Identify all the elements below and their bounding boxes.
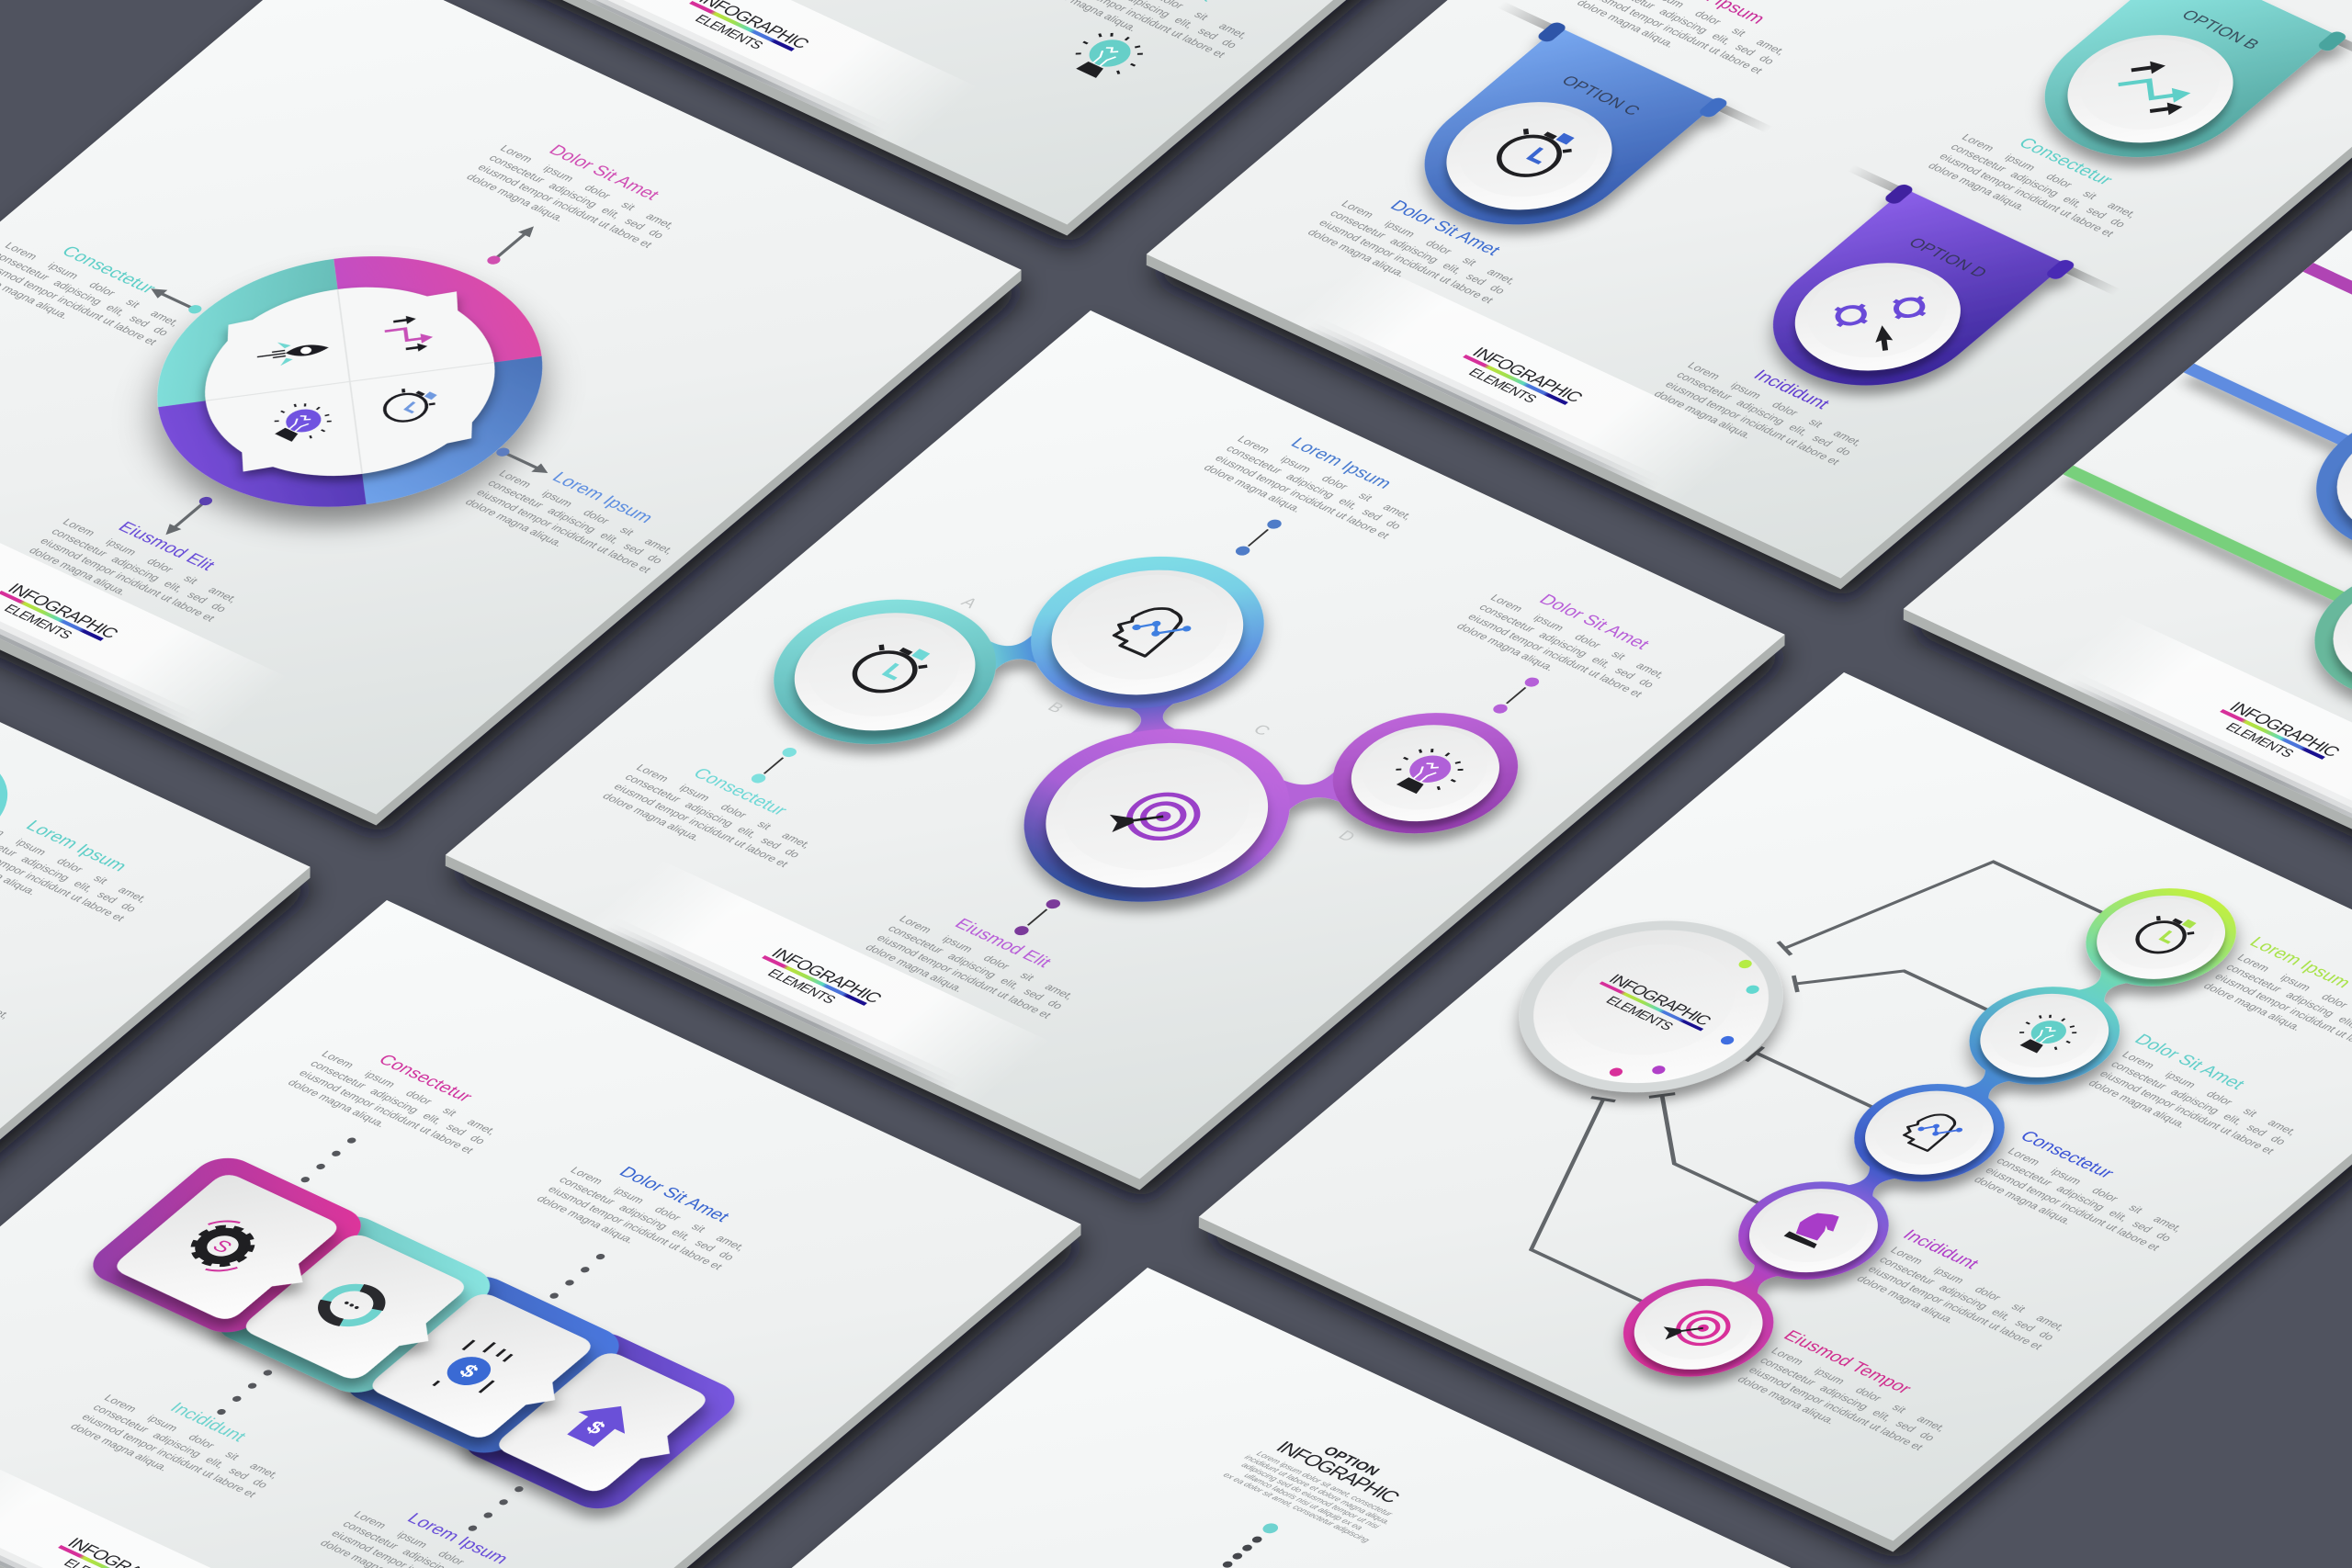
chain diagram bbox=[702, 465, 1579, 987]
hub logo bbox=[1585, 970, 1717, 1043]
text block: dolor sit amet bbox=[464, 127, 698, 260]
text block: eiusmod tempor: eiusmod tempor incididunt ut labore et bbox=[1746, 1364, 1927, 1452]
text block: lorem ipsum bbox=[1201, 417, 1435, 550]
description: Lorem ipsum dolor sit amet, consectetur bbox=[1255, 1450, 1396, 1518]
ring C bbox=[969, 695, 1344, 935]
icon: target bbox=[1097, 782, 1211, 854]
text block: dolor sit amet: dolore magna aliqua. bbox=[534, 1193, 638, 1246]
text block: consectetur: consectetur adipiscing elit, sed do bbox=[308, 1058, 489, 1146]
text block: eiusmod elit: consectetur adipiscing elit, sed do bbox=[885, 923, 1066, 1011]
text block: dolor sit amet: Dolor Sit Amet bbox=[615, 1164, 734, 1225]
text block: incididunt: dolore magna aliqua. bbox=[1854, 1273, 1958, 1325]
plate D bbox=[1316, 706, 1534, 846]
text block: lorem ipsum: Lorem Ipsum bbox=[21, 818, 131, 874]
text block: eiusmod elit bbox=[863, 897, 1097, 1030]
segment: purple bbox=[122, 333, 454, 535]
panel: right sheet bbox=[1895, 64, 2352, 944]
plate A bbox=[752, 591, 1018, 761]
text block: consectetur: eiusmod tempor incididunt ut labore et bbox=[611, 782, 792, 869]
text block: dolor sit amet: eiusmod tempor incididunt ut labore et bbox=[1316, 218, 1497, 306]
hub bbox=[1465, 888, 1837, 1125]
text block: dolor sit amet: dolore magna aliqua. bbox=[2086, 1077, 2189, 1130]
connector: B to C bbox=[1121, 699, 1183, 739]
ribbon: option B: OPTION B bbox=[2177, 7, 2264, 52]
text block: dolor sit amet: consectetur adipiscing elit, sed do bbox=[2108, 1059, 2289, 1147]
label A: A bbox=[957, 594, 981, 611]
icon: dollar arrow bbox=[557, 1395, 644, 1451]
text block: lorem ipsum: dolore magna aliqua. bbox=[2200, 981, 2304, 1032]
text block: incididunt: eiusmod tempor incididunt ut labore et bbox=[1662, 379, 1843, 468]
text block: incididunt bbox=[1850, 1226, 2088, 1361]
text block: consectetur: consectetur adipiscing elit, sed do bbox=[1994, 1156, 2175, 1244]
arrow: right bbox=[493, 446, 553, 478]
icon: rocket bbox=[239, 318, 347, 387]
pin: eiusmod elit bbox=[1012, 897, 1063, 937]
text block: lorem ipsum bbox=[1574, 0, 1808, 85]
logo: INFOGRAPHIC bbox=[1468, 344, 1587, 406]
text block: eiusmod elit: Eiusmod Elit bbox=[114, 519, 220, 574]
dotted leader: incididunt bbox=[215, 1369, 274, 1416]
description: ullamco laboris nisi ut aliquip ex ea bbox=[1242, 1472, 1365, 1531]
arrow: left bbox=[146, 285, 205, 316]
text block: dolor sit amet: consectetur adipiscing elit, sed do bbox=[556, 1174, 737, 1262]
band 2 bbox=[205, 1208, 503, 1401]
icon: head bbox=[1103, 600, 1199, 661]
text block: incididunt: dolore magna aliqua. bbox=[68, 1421, 171, 1473]
plate 3 bbox=[366, 1290, 612, 1449]
logo bbox=[748, 944, 886, 1020]
text block: consectetur: Lorem ipsum dolor sit amet, bbox=[2, 241, 183, 328]
leader lines bbox=[1453, 825, 2111, 1305]
panel: process hub sheet bbox=[1191, 672, 2352, 1552]
text block: dolor sit amet: eiusmod tempor incididunt ut labore et bbox=[475, 162, 656, 250]
arrow: bottom bbox=[160, 495, 216, 537]
ribbon: option D: OPTION D bbox=[1905, 235, 1991, 280]
text block: consectetur: eiusmod tempor incididunt ut labore et bbox=[1937, 151, 2118, 239]
text block: consectetur bbox=[1968, 1128, 2205, 1262]
dotted leader bbox=[1218, 1521, 1281, 1568]
ribbon: option B bbox=[1951, 0, 2352, 209]
text block: consectetur: eiusmod tempor incididunt ut labore et bbox=[1983, 1165, 2163, 1253]
text block: lorem ipsum: Lorem Ipsum bbox=[2245, 934, 2352, 991]
text block: lorem ipsum: Lorem ipsum dolor sit amet, bbox=[1235, 434, 1415, 522]
text block: incididunt: eiusmod tempor incididunt ut labore et bbox=[1865, 1264, 2046, 1352]
text block: consectetur: dolore magna aliqua. bbox=[600, 791, 704, 843]
dotted leader: lorem ipsum bbox=[467, 1485, 526, 1532]
text block: dolor sit amet: Dolor Sit Amet bbox=[1534, 592, 1654, 653]
text block: dolor sit amet: Lorem ipsum dolor sit amet, bbox=[497, 143, 678, 231]
logo: INFOGRAPHIC bbox=[4, 581, 122, 642]
text block: dolor sit amet: eiusmod tempor incididunt ut labore et bbox=[1465, 612, 1645, 699]
text block: eiusmod elit: consectetur adipiscing elit, sed do bbox=[49, 526, 230, 615]
ring: green bbox=[2002, 413, 2352, 726]
segment: magenta bbox=[246, 229, 578, 430]
connector: C to D bbox=[1276, 767, 1347, 816]
text block: consectetur: dolore magna aliqua. bbox=[1925, 161, 2029, 212]
text block: lorem ipsum: dolore magna aliqua. bbox=[462, 497, 566, 548]
text block: dolor sit amet: Dolor Sit Amet bbox=[545, 141, 664, 204]
segment: blue bbox=[262, 308, 584, 525]
text block: eiusmod elit: Eiusmod Elit bbox=[950, 916, 1057, 971]
text block: lorem ipsum bbox=[2198, 934, 2352, 1069]
text block: lorem ipsum: Lorem Ipsum bbox=[548, 469, 658, 526]
text block: incididunt: consectetur adipiscing elit, sed do bbox=[1674, 369, 1854, 457]
text block: eiusmod elit: Lorem ipsum dolor sit amet, bbox=[897, 914, 1077, 1001]
ring: teal bbox=[0, 732, 39, 869]
logo: ELEMENTS bbox=[763, 967, 839, 1007]
text block: lorem ipsum bbox=[462, 452, 696, 585]
square chain bbox=[78, 1150, 748, 1517]
icon: head bbox=[1896, 1108, 1968, 1155]
text block: incididunt: Lorem ipsum dolor sit amet, bbox=[1685, 360, 1865, 448]
text block: consectetur: dolore magna aliqua. bbox=[1971, 1174, 2075, 1226]
text block: second bbox=[0, 916, 33, 1049]
ribbon: option D bbox=[1679, 162, 2124, 437]
text block: eiusmod elit: Lorem ipsum dolor sit amet, bbox=[60, 516, 241, 604]
plate B bbox=[1006, 546, 1288, 728]
ribbon: option C bbox=[1328, 0, 1776, 276]
text block: eiusmod tempor bbox=[1731, 1327, 1969, 1462]
text block: incididunt: Incididunt bbox=[165, 1399, 251, 1445]
text block: consectetur: Consectetur bbox=[2014, 135, 2118, 188]
text block: dolor sit amet bbox=[534, 1148, 768, 1281]
inner plate bbox=[121, 235, 578, 528]
logo: ELEMENTS bbox=[2222, 721, 2297, 761]
text block: dolor sit amet: consectetur adipiscing elit, sed do bbox=[486, 152, 667, 241]
text block: eiusmod tempor: consectetur adipiscing elit, sed do bbox=[1757, 1355, 1938, 1443]
panel: option ribbons sheet bbox=[1138, 0, 2352, 590]
icon: stopwatch bbox=[376, 383, 443, 426]
band 4 bbox=[452, 1325, 748, 1517]
icon: coin bbox=[425, 1336, 523, 1402]
logo: INFOGRAPHIC bbox=[767, 945, 886, 1007]
hub logo: ELEMENTS bbox=[1602, 994, 1677, 1033]
text block: dolor sit amet bbox=[1453, 576, 1688, 709]
panel: left sheet bbox=[0, 543, 319, 1423]
text block: consectetur: Lorem ipsum dolor sit amet, bbox=[2005, 1145, 2186, 1234]
connector: magenta bbox=[2303, 263, 2352, 389]
text block: dolor sit amet: Lorem ipsum dolor sit amet, bbox=[1487, 592, 1668, 681]
text block: eiusmod tempor: Eiusmod Tempor bbox=[1779, 1327, 1917, 1397]
text block: incididunt: consectetur adipiscing elit, sed do bbox=[90, 1402, 271, 1490]
hub logo: INFOGRAPHIC bbox=[1605, 971, 1715, 1028]
text block: consectetur: Consectetur bbox=[57, 243, 161, 297]
text block: incididunt: Incididunt bbox=[1898, 1226, 1984, 1272]
text block: lorem ipsum: eiusmod tempor incididunt ut labore et bbox=[1212, 453, 1393, 541]
text block: dolor sit amet: eiusmod tempor incididunt ut labore et bbox=[2097, 1068, 2278, 1156]
description: ex ea dolor sit amet, consectetur adipiscing bbox=[1221, 1471, 1372, 1544]
ring A bbox=[729, 571, 1041, 772]
text block: eiusmod elit: eiusmod tempor incididunt ut labore et bbox=[874, 932, 1055, 1021]
text block: consectetur: dolore magna aliqua. bbox=[285, 1077, 389, 1129]
logo: ELEMENTS bbox=[1464, 367, 1540, 406]
icon: bulb bbox=[2007, 1009, 2086, 1059]
icon: knight bbox=[1784, 1207, 1848, 1249]
label D: D bbox=[1335, 828, 1360, 844]
text block: dolor sit amet: consectetur adipiscing elit, sed do bbox=[1328, 208, 1509, 296]
icon: bulb bbox=[1381, 741, 1475, 801]
text block: lorem ipsum: consectetur adipiscing elit, sed do bbox=[485, 478, 666, 566]
icon: stopwatch bbox=[2128, 909, 2202, 958]
text block: incididunt: Lorem ipsum dolor sit amet, bbox=[1888, 1245, 2068, 1333]
ribbon: option C: OPTION C bbox=[1557, 73, 1644, 118]
connector: A to B bbox=[983, 629, 1044, 676]
text block: dolor sit amet: Dolor Sit Amet bbox=[1385, 197, 1505, 259]
description: adipiscing sed do eiusmod tempor ut nisi bbox=[1239, 1461, 1383, 1530]
dotted leader: dolor sit amet bbox=[548, 1253, 606, 1300]
text block: dolor sit amet: consectetur adipiscing elit, sed do bbox=[1476, 602, 1657, 690]
text block: incididunt: dolore magna aliqua. bbox=[1651, 389, 1755, 441]
logo bbox=[44, 1534, 182, 1568]
ring: blue bbox=[2116, 306, 2352, 583]
text block: lorem ipsum bbox=[317, 1493, 551, 1568]
icon: arrows bbox=[356, 301, 461, 367]
text block: consectetur: Consectetur bbox=[2016, 1128, 2119, 1182]
icon: bulb bbox=[1060, 25, 1155, 85]
text block: eiusmod elit bbox=[26, 500, 260, 633]
pin: dolor sit amet bbox=[1490, 676, 1542, 716]
text block: lorem ipsum: eiusmod tempor incididunt ut labore et bbox=[473, 487, 654, 575]
text block: dolor sit amet: Lorem ipsum dolor sit amet, bbox=[568, 1165, 748, 1253]
icon: target bbox=[1655, 1303, 1738, 1356]
text block: lorem ipsum: Lorem Ipsum bbox=[402, 1510, 513, 1567]
text block: incididunt: eiusmod tempor incididunt ut labore et bbox=[79, 1412, 260, 1500]
text block: incididunt bbox=[1651, 344, 1885, 477]
text block: consectetur bbox=[600, 746, 834, 879]
text block: lorem ipsum: consectetur adipiscing elit, sed do bbox=[1223, 444, 1404, 532]
text block: consectetur: consectetur adipiscing elit, sed do bbox=[1948, 141, 2129, 230]
description bbox=[1221, 1448, 1400, 1544]
text block: dolor sit amet: dolore magna aliqua. bbox=[1305, 227, 1408, 279]
text block: incididunt: Incididunt bbox=[1749, 367, 1835, 412]
panel: square chain sheet bbox=[0, 900, 1090, 1568]
pin: consectetur bbox=[749, 746, 799, 784]
text block: consectetur: Lorem ipsum dolor sit amet, bbox=[319, 1049, 499, 1136]
text block: lorem ipsum: Lorem Ipsum bbox=[1286, 434, 1396, 492]
text block: consectetur bbox=[285, 1032, 519, 1166]
description: incididunt ut labore et dolore magna aliqua. bbox=[1242, 1453, 1393, 1526]
plate 1 bbox=[110, 1171, 360, 1331]
label C: C bbox=[1250, 721, 1274, 739]
text block: dolor sit amet bbox=[2082, 1032, 2320, 1166]
text block: consectetur: consectetur adipiscing elit, sed do bbox=[622, 772, 803, 860]
text block: consectetur: Lorem ipsum dolor sit amet, bbox=[633, 762, 814, 851]
heading: OPTION bbox=[1319, 1445, 1383, 1478]
logo: ELEMENTS bbox=[691, 13, 766, 52]
band 3 bbox=[334, 1269, 632, 1461]
ring D bbox=[1295, 690, 1555, 856]
text block: lorem ipsum bbox=[0, 800, 170, 933]
text block: consectetur bbox=[1925, 116, 2159, 249]
text block: incididunt: consectetur adipiscing elit, sed do bbox=[1876, 1255, 2057, 1343]
hub dots bbox=[1607, 958, 1801, 1100]
label B: B bbox=[1044, 699, 1068, 716]
panel: center sheet bbox=[437, 310, 1793, 1190]
logo bbox=[2206, 698, 2344, 773]
arrow: top bbox=[484, 223, 539, 266]
plate 1 bbox=[2066, 879, 2256, 1001]
text block: dolor sit amet: dolore magna aliqua. bbox=[464, 172, 567, 223]
text block: dolor sit amet: Lorem ipsum dolor sit amet, bbox=[1339, 198, 1519, 287]
text block: dolor sit amet: Lorem ipsum dolor sit amet, bbox=[2120, 1049, 2300, 1137]
logo bbox=[675, 0, 813, 65]
plate 2 bbox=[1950, 977, 2139, 1100]
icon: stopwatch bbox=[842, 636, 938, 699]
segment: teal bbox=[115, 239, 437, 456]
plate 4 bbox=[492, 1349, 727, 1502]
text block: eiusmod elit: dolore magna aliqua. bbox=[26, 545, 130, 597]
panel: circular diagram sheet bbox=[0, 0, 1030, 826]
plate C bbox=[992, 716, 1320, 925]
text block: incididunt: Lorem ipsum dolor sit amet, bbox=[101, 1393, 282, 1481]
text block: dolor sit amet: Dolor Sit Amet bbox=[2130, 1032, 2249, 1093]
text block: lorem ipsum: dolore magna aliqua. bbox=[1201, 462, 1305, 514]
text block: dolor sit amet bbox=[1305, 182, 1539, 315]
text block: dolor sit amet: dolore magna aliqua. bbox=[1453, 621, 1557, 673]
dotted leader: consectetur bbox=[300, 1136, 357, 1183]
icon: bulb bbox=[261, 397, 342, 448]
band 1 bbox=[80, 1150, 374, 1340]
text block: incididunt bbox=[68, 1376, 302, 1509]
logo bbox=[1449, 344, 1587, 419]
panel: bottom option sheet bbox=[494, 1268, 1850, 1568]
text block: lorem ipsum: Lorem ipsum dolor sit amet, bbox=[496, 468, 676, 556]
plate 4 bbox=[1718, 1173, 1908, 1294]
icon: gear bbox=[173, 1213, 273, 1278]
logo: INFOGRAPHIC bbox=[2225, 699, 2344, 761]
logo: ELEMENTS bbox=[0, 603, 75, 642]
circular chart bbox=[79, 209, 621, 555]
icon: donut bbox=[313, 1280, 390, 1330]
text block: eiusmod elit: eiusmod tempor incididunt ut labore et bbox=[38, 536, 218, 624]
heading: INFOGRAPHIC bbox=[1272, 1438, 1406, 1506]
text block: consectetur: Consectetur bbox=[688, 765, 792, 819]
ring B bbox=[983, 527, 1312, 738]
plate 5 bbox=[1603, 1269, 1792, 1392]
plate 3 bbox=[1834, 1075, 2024, 1196]
text block: eiusmod tempor: dolore magna aliqua. bbox=[1735, 1374, 1838, 1427]
text block: consectetur: Consectetur bbox=[374, 1052, 477, 1105]
text block: consectetur: eiusmod tempor incididunt ut labore et bbox=[296, 1067, 477, 1156]
text block: dolor sit amet: eiusmod tempor incididunt ut labore et bbox=[545, 1184, 726, 1272]
pin: lorem ipsum bbox=[1233, 518, 1284, 558]
panel: top sheet bbox=[365, 0, 1721, 236]
text block: consectetur bbox=[0, 224, 202, 357]
plate 2 bbox=[239, 1231, 486, 1390]
text block: aliqua bbox=[1036, 0, 1271, 70]
ring chain bbox=[1592, 870, 2267, 1395]
text block: eiusmod elit: dolore magna aliqua. bbox=[863, 942, 967, 994]
text block: eiusmod tempor: Lorem ipsum dolor sit amet, bbox=[1769, 1346, 1949, 1434]
text block: consectetur: Lorem ipsum dolor sit amet, bbox=[1959, 132, 2140, 220]
